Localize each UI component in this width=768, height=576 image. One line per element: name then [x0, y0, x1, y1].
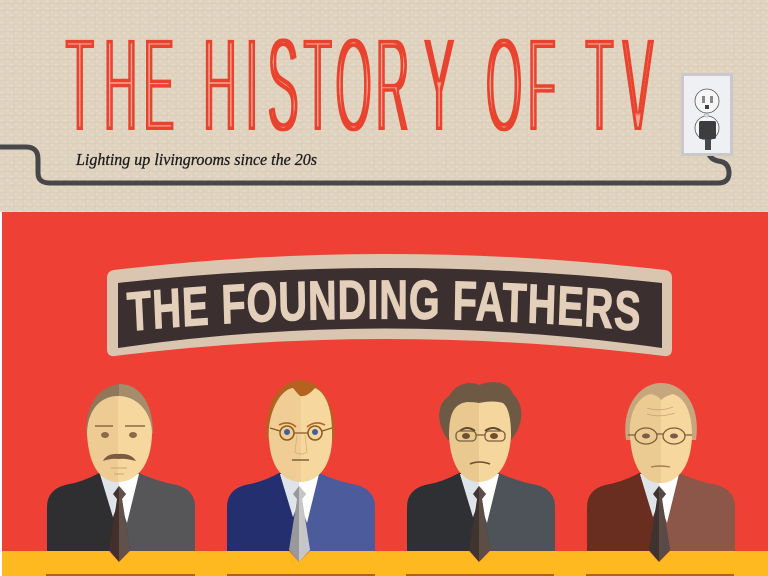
- person 1: moustached man in black suit: [47, 384, 195, 562]
- person 3: curly haired man in charcoal suit: [407, 382, 555, 562]
- power cord: [0, 132, 729, 183]
- title: THEHISTORYOFTV: [65, 11, 654, 160]
- banner text: THE FOUNDING FATHERS: [126, 280, 640, 331]
- panel: red founding fathers background: [2, 212, 768, 576]
- person 2: man with round glasses in blue suit: [227, 380, 375, 562]
- icon: wall outlet with plug: [681, 73, 733, 156]
- person 4: balding man with glasses in brown suit: [587, 383, 735, 562]
- tagline: Lighting up livingrooms since the 20s: [75, 150, 317, 169]
- banner: the founding fathers: [107, 254, 672, 356]
- desk: yellow bar: [2, 551, 768, 576]
- panel: linen header background: [0, 0, 768, 212]
